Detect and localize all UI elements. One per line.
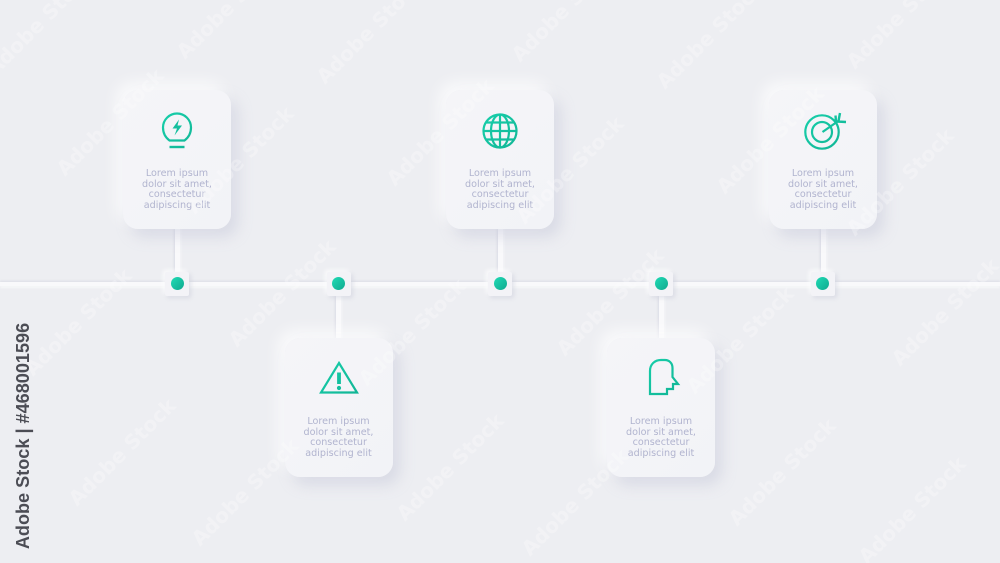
text: card 4: adipiscing elit [628, 448, 694, 459]
side stock id text: Adobe Stock | #468001596 [12, 322, 32, 549]
text: card 3: Lorem ipsum [469, 168, 531, 179]
text: Adobe Stock [517, 444, 633, 560]
panel: card 1 lightbulb [123, 90, 231, 229]
text: card 4: Lorem ipsum [630, 416, 692, 427]
text: card 3: adipiscing elit [467, 200, 533, 211]
text: Adobe Stock [724, 414, 840, 530]
text: Adobe Stock [52, 64, 168, 180]
connector: card 1 [175, 228, 180, 273]
text: Adobe Stock [354, 274, 470, 390]
icon: lightning bulb [162, 112, 192, 148]
text: Adobe Stock [682, 282, 798, 398]
text: Adobe Stock [182, 102, 298, 218]
panel: card 2 warning [284, 338, 392, 477]
text: Adobe Stock [224, 235, 340, 351]
text: card 2 [304, 416, 373, 459]
text: Adobe Stock [20, 264, 136, 380]
text: card 5: dolor sit amet, [788, 179, 858, 190]
text: card 1: consectetur [149, 189, 205, 200]
text: Adobe Stock [842, 124, 958, 240]
timeline node 2 [326, 272, 350, 296]
timeline line [0, 282, 1000, 286]
text: Adobe Stock [64, 394, 180, 510]
text: card 4: dolor sit amet, [626, 427, 696, 438]
text: card 3 [465, 168, 535, 211]
text: card 2: dolor sit amet, [304, 427, 373, 438]
timeline node 1 [165, 272, 189, 296]
text: card 1: adipiscing elit [144, 200, 210, 211]
text: card 1: Lorem ipsum [146, 168, 208, 179]
text: card 5: adipiscing elit [790, 200, 856, 211]
text: card 3: dolor sit amet, [465, 179, 535, 190]
connector: card 4 [659, 295, 664, 339]
panel: card 3 globe [446, 90, 554, 229]
text: card 1: dolor sit amet, [142, 179, 212, 190]
timeline node 5 [810, 272, 834, 296]
icon: target with arrow [804, 112, 846, 150]
panel: card 5 target [769, 90, 877, 229]
text: card 2: consectetur [310, 437, 367, 448]
text: card 1 [142, 168, 212, 211]
text: card 5: consectetur [795, 189, 851, 200]
timeline node 4 [649, 272, 673, 296]
text: card 4: consectetur [633, 437, 689, 448]
connector: card 3 [498, 228, 503, 273]
text: Adobe Stock [512, 112, 628, 228]
text: card 2: adipiscing elit [305, 448, 372, 459]
text: Adobe Stock [392, 409, 508, 525]
icon: globe [482, 113, 518, 149]
text: card 4 [626, 416, 696, 459]
text: Adobe Stock [187, 434, 303, 550]
text: card 3: consectetur [472, 189, 528, 200]
text: card 5 [788, 168, 858, 211]
connector: card 2 [336, 295, 341, 339]
text: Adobe Stock [887, 254, 1000, 370]
icon: warning triangle [319, 361, 359, 394]
text: card 5: Lorem ipsum [792, 168, 854, 179]
text: Adobe Stock [382, 74, 498, 190]
text: Adobe Stock [552, 244, 668, 360]
text: card 2: Lorem ipsum [307, 416, 370, 427]
timeline node 3 [488, 272, 512, 296]
connector: card 5 [821, 228, 826, 273]
text: Adobe Stock [712, 82, 828, 198]
panel: card 4 head [607, 338, 715, 477]
icon: head profile [648, 358, 680, 396]
